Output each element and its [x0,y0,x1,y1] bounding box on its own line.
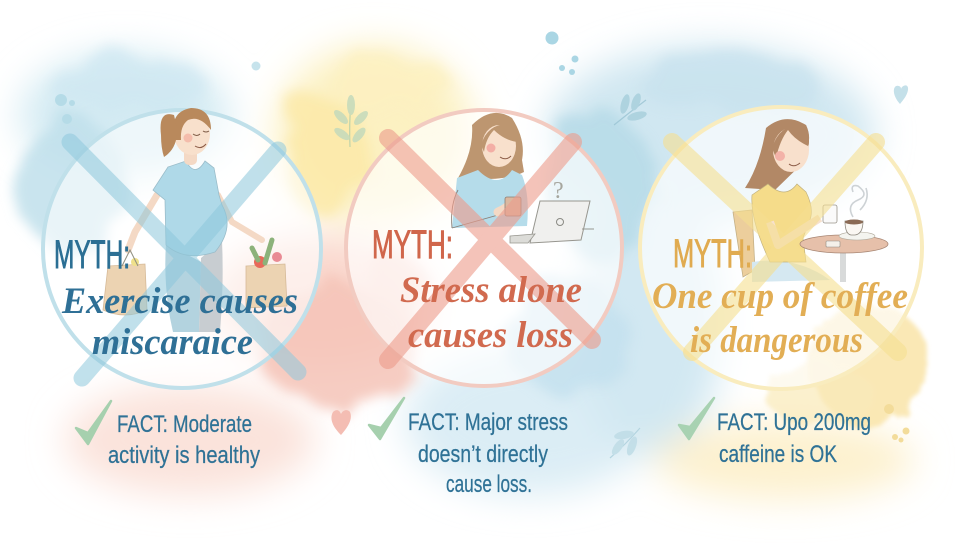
leaf sprig: green [332,95,370,147]
leaf sprig: blue upper [614,92,648,125]
illustration: woman at laptop with mug [452,113,594,243]
fact 2 text: FACT: Major stress [408,409,568,436]
myth statement [61,281,298,363]
cafe table [800,220,888,282]
myth statement: miscaraice [92,322,253,363]
question mark scribble: ? [553,178,564,204]
heart: blue [894,85,908,104]
panel: myth 1 exercise [43,108,321,388]
laptop [510,201,594,243]
blue cross mark [70,142,298,378]
fact 3 text: caffeine is OK [719,441,837,468]
myth statement [652,276,908,361]
myth label: MYTH: [673,232,752,276]
myth statement: Stress alone [400,270,582,311]
myth statement [400,270,582,356]
red cross mark [388,138,592,360]
panel: myth 3 coffee [640,107,922,389]
fact 1 text [108,411,260,469]
fact 3 text: FACT: Upo 200mg [717,409,871,436]
bag: left groceries [103,250,147,315]
myth label: MYTH: [372,223,453,267]
panel: myth 2 stress [346,110,622,386]
fact 1 check mark [76,401,111,444]
steam [850,186,867,217]
fact 2 check mark [369,398,404,439]
fact 2 text: cause loss. [446,471,532,498]
fact 3 text [717,409,871,468]
myth statement: One cup of coffee [652,276,908,317]
heart: red [331,410,351,435]
fact 2 text: doesn’t directly [418,441,548,468]
fact 1 text: activity is healthy [108,442,260,469]
fact 2 text [408,409,568,498]
illustration: pregnant woman with shopping bags [103,108,287,332]
fact 1 text: FACT: Moderate [117,411,252,438]
decorative droplets [55,32,910,442]
myth label: MYTH: [54,233,130,277]
myth statement: causes loss [408,315,573,356]
fact 3 check mark [679,398,714,439]
myth statement: Exercise causes [61,281,298,322]
myth statement: is dangerous [690,320,863,361]
yellow cross mark [672,142,898,352]
bag: right groceries [246,240,287,308]
illustration: woman with coffee at table [733,119,888,282]
leaf sprig: blue lower [610,428,640,458]
